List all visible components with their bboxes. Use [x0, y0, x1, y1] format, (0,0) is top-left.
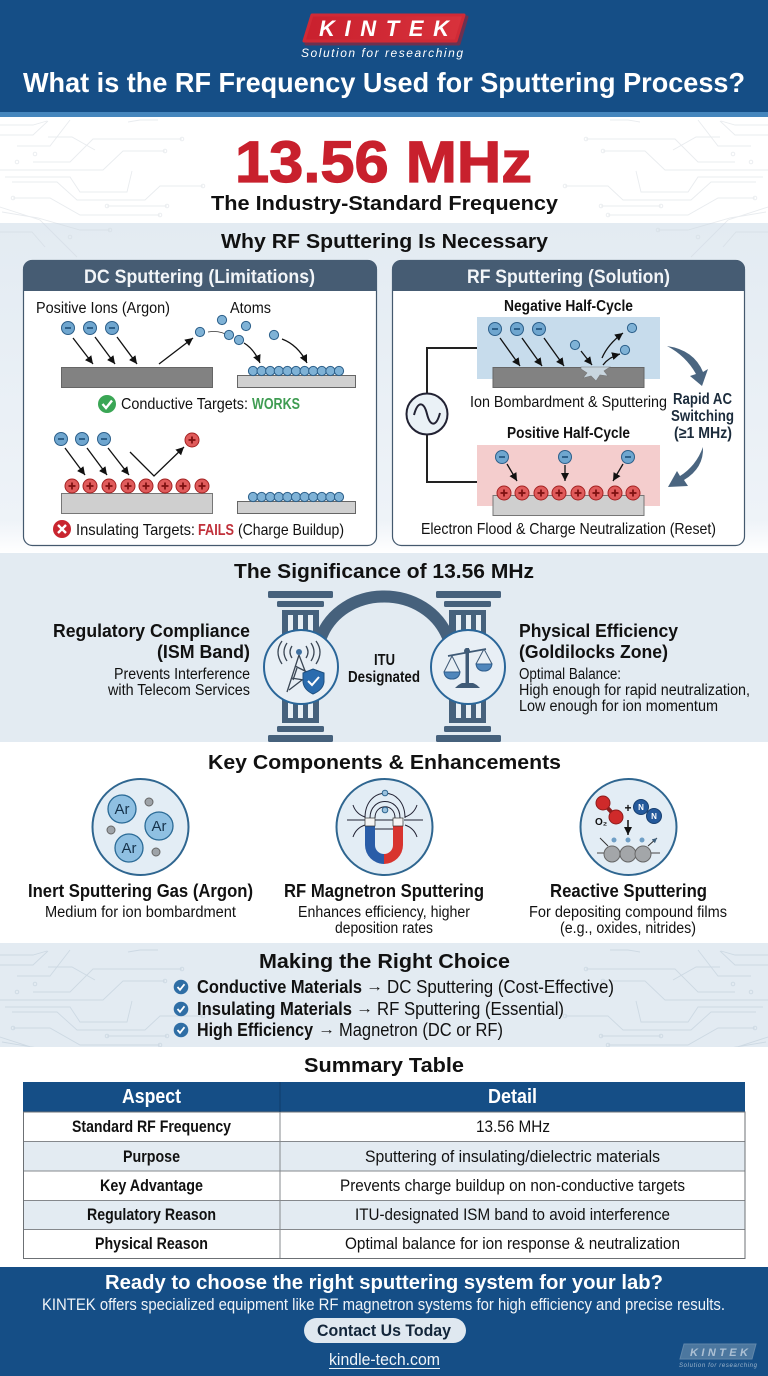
icon: argon gas: Ar [114, 801, 130, 818]
watermark logo [679, 1344, 758, 1369]
center label: ITU [374, 652, 395, 669]
choice: high efficiency: Magnetron (DC or RF) [339, 1020, 503, 1040]
label: magnetron: Enhances efficiency, higher [298, 904, 470, 921]
section: key components [28, 751, 727, 937]
panel: RF sputtering: RF Sputtering (Solution) [467, 267, 670, 288]
left text: regulatory compliance: (ISM Band) [157, 641, 250, 662]
right text: physical efficiency [519, 620, 750, 715]
diagram: positive half-cycle [477, 445, 660, 516]
heading: The Significance of 13.56 MHz [234, 560, 534, 583]
diagram: insulating target [54, 432, 356, 514]
footer heading: Ready to choose the right sputtering system for your lab? [105, 1271, 663, 1294]
status: conductive works [98, 395, 300, 413]
icon: balance scales [431, 630, 505, 704]
choice: conductive [174, 977, 614, 997]
switching label: Switching [671, 408, 734, 425]
right text: physical efficiency: High enough for rapid neutralization, [519, 682, 750, 699]
center label [348, 652, 420, 686]
atoms label: Atoms [230, 300, 271, 317]
left text: regulatory compliance: Regulatory Compliance [53, 620, 250, 641]
table: Key Advantage [100, 1177, 203, 1195]
hero frequency: 13.56 MHz [235, 130, 532, 195]
label: magnetron: deposition rates [335, 920, 433, 937]
choice: high efficiency: High Efficiency [197, 1020, 313, 1040]
section: significance of 13.56 MHz [0, 553, 768, 742]
heading: Making the Right Choice [259, 950, 510, 973]
icon: argon gas: Ar [152, 818, 167, 835]
section: making the right choice [0, 943, 768, 1047]
left text: regulatory compliance: Prevents Interference [114, 666, 250, 683]
status: insulating fails: FAILS [198, 522, 234, 539]
icon: argon gas [92, 779, 188, 875]
status: insulating fails: Insulating Targets: [76, 522, 195, 539]
AC source and wiring [406, 348, 477, 482]
right text: physical efficiency: Optimal Balance: [519, 666, 621, 683]
arrow: switch back [668, 447, 703, 487]
icon: antenna with shield [264, 630, 338, 704]
choice: insulating: → [356, 1000, 373, 1016]
section: summary table [23, 1054, 745, 1258]
label: argon [28, 881, 253, 921]
choice: conductive: DC Sputtering (Cost-Effective) [387, 977, 614, 997]
circuit pattern: top left [0, 120, 206, 223]
footer call to action [0, 1267, 768, 1376]
hero subtitle: The Industry-Standard Frequency [211, 192, 559, 215]
panel: DC sputtering: DC Sputtering (Limitations) [84, 267, 315, 288]
table: Prevents charge buildup on non-conductive targets [340, 1177, 685, 1195]
icon: reactive gas: O₂ [595, 817, 607, 828]
label: reactive: Reactive Sputtering [550, 881, 707, 901]
panel: RF sputtering [392, 260, 745, 546]
arch [320, 596, 449, 640]
right pillar [436, 591, 501, 742]
label: magnetron: RF Magnetron Sputtering [284, 881, 484, 901]
table: ITU-designated ISM band to avoid interference [355, 1206, 670, 1224]
table: Physical Reason [95, 1235, 208, 1253]
icon: reactive gas: + [624, 801, 632, 815]
contact button: Contact Us Today [317, 1321, 452, 1340]
table: 13.56 MHz [476, 1118, 550, 1136]
arrow: switch down [667, 346, 708, 386]
watermark logo: KINTEK [690, 1347, 749, 1359]
status: insulating fails: (Charge Buildup) [238, 522, 344, 539]
diagram: conductive target [62, 315, 356, 388]
ion label: Positive Ions (Argon) [36, 300, 170, 317]
heading: Key Components & Enhancements [208, 751, 561, 774]
table [23, 1082, 745, 1258]
icon: argon gas: Ar [122, 840, 137, 857]
label: reactive [529, 881, 727, 937]
positive half-cycle label: Positive Half-Cycle [507, 425, 630, 442]
icon: reactive gas: N [638, 803, 644, 812]
choice: insulating: Insulating Materials [197, 999, 352, 1019]
label: reactive: (e.g., oxides, nitrides) [560, 920, 696, 937]
heading: Summary Table [304, 1054, 464, 1077]
label: argon: Inert Sputtering Gas (Argon) [28, 881, 253, 901]
left text: regulatory compliance: with Telecom Services [107, 682, 250, 699]
watermark logo: Solution for researching [679, 1363, 758, 1369]
circuit pattern: top right [562, 120, 768, 223]
logo: KINTEK [319, 16, 451, 41]
table: Aspect [122, 1086, 181, 1108]
switching label [671, 391, 734, 442]
right text: physical efficiency: Low enough for ion momentum [519, 698, 718, 715]
status: conductive works: Conductive Targets: [121, 396, 248, 413]
negative half-cycle label: Negative Half-Cycle [504, 298, 633, 315]
heading: Why RF Sputtering Is Necessary [221, 230, 549, 253]
choice: conductive: → [366, 978, 383, 994]
contact button [304, 1318, 466, 1343]
icon: reactive gas: N [651, 812, 657, 821]
right text: physical efficiency: Physical Efficiency [519, 620, 679, 641]
table: Optimal balance for ion response & neutralization [345, 1235, 680, 1253]
center label: Designated [348, 669, 420, 686]
section: why RF sputtering [0, 223, 768, 546]
logo [301, 15, 467, 60]
table: Detail [488, 1086, 537, 1108]
left pillar [268, 591, 333, 742]
left text: regulatory compliance [53, 620, 250, 699]
choice: insulating [174, 999, 564, 1019]
website link: kindle-tech.com [329, 1350, 440, 1369]
right text: physical efficiency: (Goldilocks Zone) [519, 641, 668, 662]
table: Sputtering of insulating/dielectric materials [365, 1148, 660, 1166]
switching label: (≥1 MHz) [674, 425, 732, 442]
table: Regulatory Reason [87, 1206, 216, 1224]
choice: conductive: Conductive Materials [197, 977, 362, 997]
label: magnetron [284, 881, 484, 937]
panel: DC sputtering [23, 260, 377, 546]
table: Purpose [123, 1148, 180, 1166]
negative half-cycle caption: Ion Bombardment & Sputtering [470, 394, 667, 411]
diagram: negative half-cycle [477, 317, 660, 388]
icon: magnetron [336, 779, 432, 875]
choice: high efficiency: → [318, 1021, 335, 1037]
title: What is the RF Frequency Used for Sputtering Process? [23, 67, 745, 98]
header band [0, 0, 768, 117]
status: conductive works: WORKS [252, 396, 300, 413]
status: insulating fails [53, 520, 344, 539]
logo: Solution for researching [301, 46, 463, 60]
choice: insulating: RF Sputtering (Essential) [377, 999, 564, 1019]
icon: reactive gas [580, 779, 676, 875]
choice: high efficiency [174, 1020, 503, 1040]
label: argon: Medium for ion bombardment [45, 904, 237, 921]
label: reactive: For depositing compound films [529, 904, 727, 921]
switching label: Rapid AC [673, 391, 732, 408]
table: Standard RF Frequency [72, 1118, 232, 1136]
positive half-cycle caption: Electron Flood & Charge Neutralization (Reset) [421, 521, 716, 538]
